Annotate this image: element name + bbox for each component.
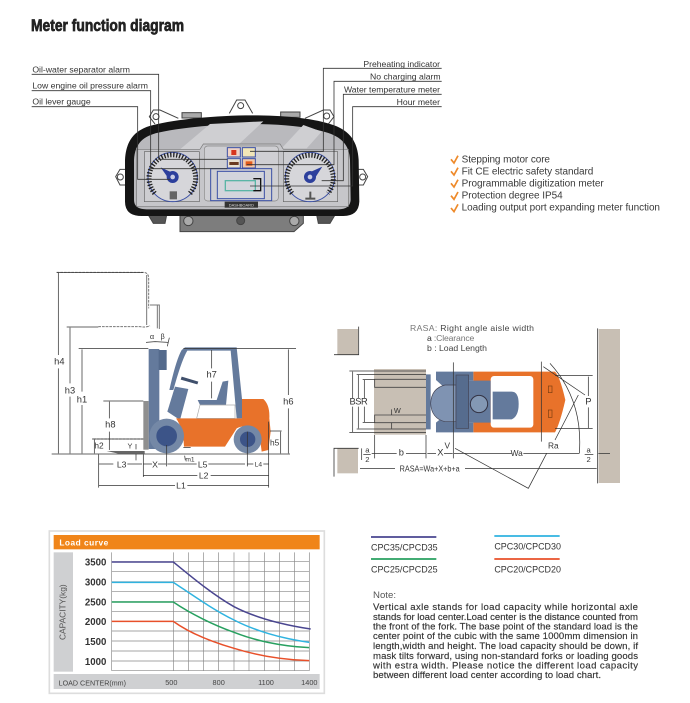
dimension labels: Wa: [511, 448, 523, 458]
dimension labels: a: [365, 445, 370, 454]
feature text: Loading output port expanding meter function: [462, 203, 660, 214]
cluster labels: Oil-water separator alarm: [32, 65, 130, 75]
cluster labels: Hour meter: [397, 97, 440, 107]
title: Meter function diagram: [31, 17, 184, 35]
dimension labels: V: [445, 440, 451, 450]
note text: length,width and height. The load capacity should be down, if: [373, 641, 638, 652]
note text: mask tilts forward, using non-standard forks or loading goods: [373, 651, 638, 662]
icon: hour meter display: DASHBOARD: [229, 202, 254, 207]
dimension labels: h1: [77, 394, 87, 404]
cluster labels: Water temperature meter: [344, 84, 440, 94]
note text: stands for load center.Load center is the distance counted from: [373, 612, 638, 623]
note text: with estra width. Please notice the different load capacity: [372, 660, 638, 672]
legend: CPC35: CPC35/CPCD35: [371, 542, 438, 552]
dimension labels: β: [161, 332, 165, 341]
panel: forklift side view: [52, 272, 296, 491]
dimension labels: R: [361, 397, 368, 407]
dimension labels: X: [437, 448, 444, 458]
legend: CPC30: [494, 536, 561, 551]
dimension labels: X: [152, 459, 158, 469]
dimension labels: 2: [365, 455, 369, 464]
dimension labels: h8: [105, 420, 116, 430]
icon: hour meter display: [211, 169, 272, 208]
chart header: [54, 535, 320, 549]
legend: CPC35: [371, 537, 438, 552]
legend: CPC25: CPC25/CPCD25: [371, 564, 438, 574]
dimension labels: P: [585, 396, 591, 406]
dimension labels: W: [394, 406, 401, 415]
dimension labels: L2: [199, 470, 209, 480]
dimension labels: h6: [283, 396, 294, 406]
y axis values: 1000: [85, 657, 106, 668]
dimension labels: Ra: [548, 440, 559, 450]
dimension labels: h4: [54, 357, 65, 367]
icon: mounting tabs: [116, 100, 368, 232]
icon: check marks: [451, 156, 458, 212]
truck body top view: [426, 372, 565, 432]
legend: CPC30: CPC30/CPCD30: [494, 541, 561, 551]
x axis band: 800: [213, 678, 225, 687]
feature list: [451, 155, 660, 214]
x axis band: LOAD CENTER(mm): [59, 678, 126, 687]
dimension labels: [54, 332, 294, 491]
forks: [375, 379, 426, 423]
note text: center point of the cubic with the same 1000mm dimension in: [373, 631, 638, 642]
dimension labels: 2: [587, 455, 591, 464]
wheels: [149, 419, 262, 453]
icon: left fuel gauge: [148, 152, 197, 202]
panel: load curve chart: [49, 531, 324, 693]
dimension labels: RASA=Wa+X+b+a: [400, 464, 460, 474]
panel: forklift top view aisle diagram: [334, 323, 620, 488]
legend: CPC20: [494, 559, 561, 574]
dimension labels: h7: [206, 370, 217, 380]
heading text: RASA: Right angle aisle width: [410, 323, 534, 333]
dimension labels: h5: [270, 438, 280, 448]
y axis values: 3500: [85, 558, 106, 569]
cluster labels: [32, 59, 441, 107]
heading text: b : Load Length: [427, 343, 487, 353]
x axis band: 500: [165, 678, 177, 687]
cluster labels: Low engine oil pressure alarm: [32, 80, 148, 90]
dimension labels: L4: [255, 461, 262, 468]
icon: right temperature gauge: [285, 152, 335, 202]
dimension labels: [350, 396, 592, 474]
chart legend: [371, 536, 561, 574]
legend: CPC25: [371, 559, 438, 574]
y axis values: 1500: [85, 637, 106, 648]
steering and seat: [167, 377, 228, 420]
note text: Vertical axle stands for load capacity while horizontal axle: [373, 602, 638, 613]
walls: [337, 329, 620, 483]
dimension labels: h3: [65, 385, 75, 395]
y axis values: 3000: [85, 577, 106, 588]
feature text: Fit CE electric safety standard: [462, 166, 593, 177]
feature text: Protection degree IP54: [462, 191, 563, 202]
note text: the front of the fork. The base point of the standard load is the: [373, 622, 638, 632]
icon: warning lights: [227, 148, 255, 168]
note text: between different load center according to load chart.: [373, 670, 601, 681]
y axis values: 2000: [85, 617, 106, 628]
forklift body: [176, 399, 271, 452]
note text: Note:: [373, 590, 396, 601]
grid: [112, 552, 309, 671]
x axis band: [54, 674, 320, 689]
heading text: [410, 323, 534, 353]
raised fork outline: [57, 272, 159, 439]
y axis values: [85, 558, 106, 668]
dimension labels: b: [399, 448, 404, 458]
dimension lines: [349, 362, 610, 488]
cluster housing: [125, 115, 359, 216]
dimension labels: h2: [94, 441, 104, 451]
feature text: Stepping motor core: [462, 155, 550, 166]
dimension labels: m1: [185, 456, 195, 463]
steering wheel: [470, 395, 488, 413]
dimension labels: Y: [128, 442, 133, 451]
feature text: Programmable digitization meter: [462, 178, 604, 189]
forklift mast: [107, 349, 167, 454]
y axis band: [54, 552, 73, 672]
dimension labels: L5: [198, 459, 208, 469]
dimension labels: L1: [176, 481, 186, 491]
cluster labels: Preheating indicator: [363, 59, 440, 69]
dimension labels: S: [355, 397, 361, 407]
chart header: Load curve: [59, 537, 109, 547]
cluster labels: Oil lever gauge: [32, 96, 91, 106]
y axis band: CAPACITY(kg): [58, 584, 68, 640]
forklift overhead guard: [169, 347, 244, 418]
dimension labels: α: [150, 332, 155, 341]
dimension lines: [52, 272, 296, 488]
cluster labels: No charging alarm: [370, 71, 441, 81]
leader lines: [32, 68, 442, 186]
dimension labels: B: [350, 397, 356, 407]
legend: CPC20: CPC20/CPCD20: [494, 564, 561, 574]
dimension labels: L3: [117, 459, 127, 469]
dimension labels: a: [587, 445, 592, 454]
x axis band: 1100: [258, 678, 274, 687]
y axis values: 2500: [85, 597, 106, 608]
panel: instrument cluster: [32, 59, 442, 232]
x axis band: 1400: [301, 678, 317, 687]
cluster face: [134, 124, 351, 209]
note text: [372, 590, 638, 681]
heading text: a :Clearance: [427, 333, 475, 343]
feature text: [462, 155, 660, 214]
load curves: [112, 562, 311, 661]
